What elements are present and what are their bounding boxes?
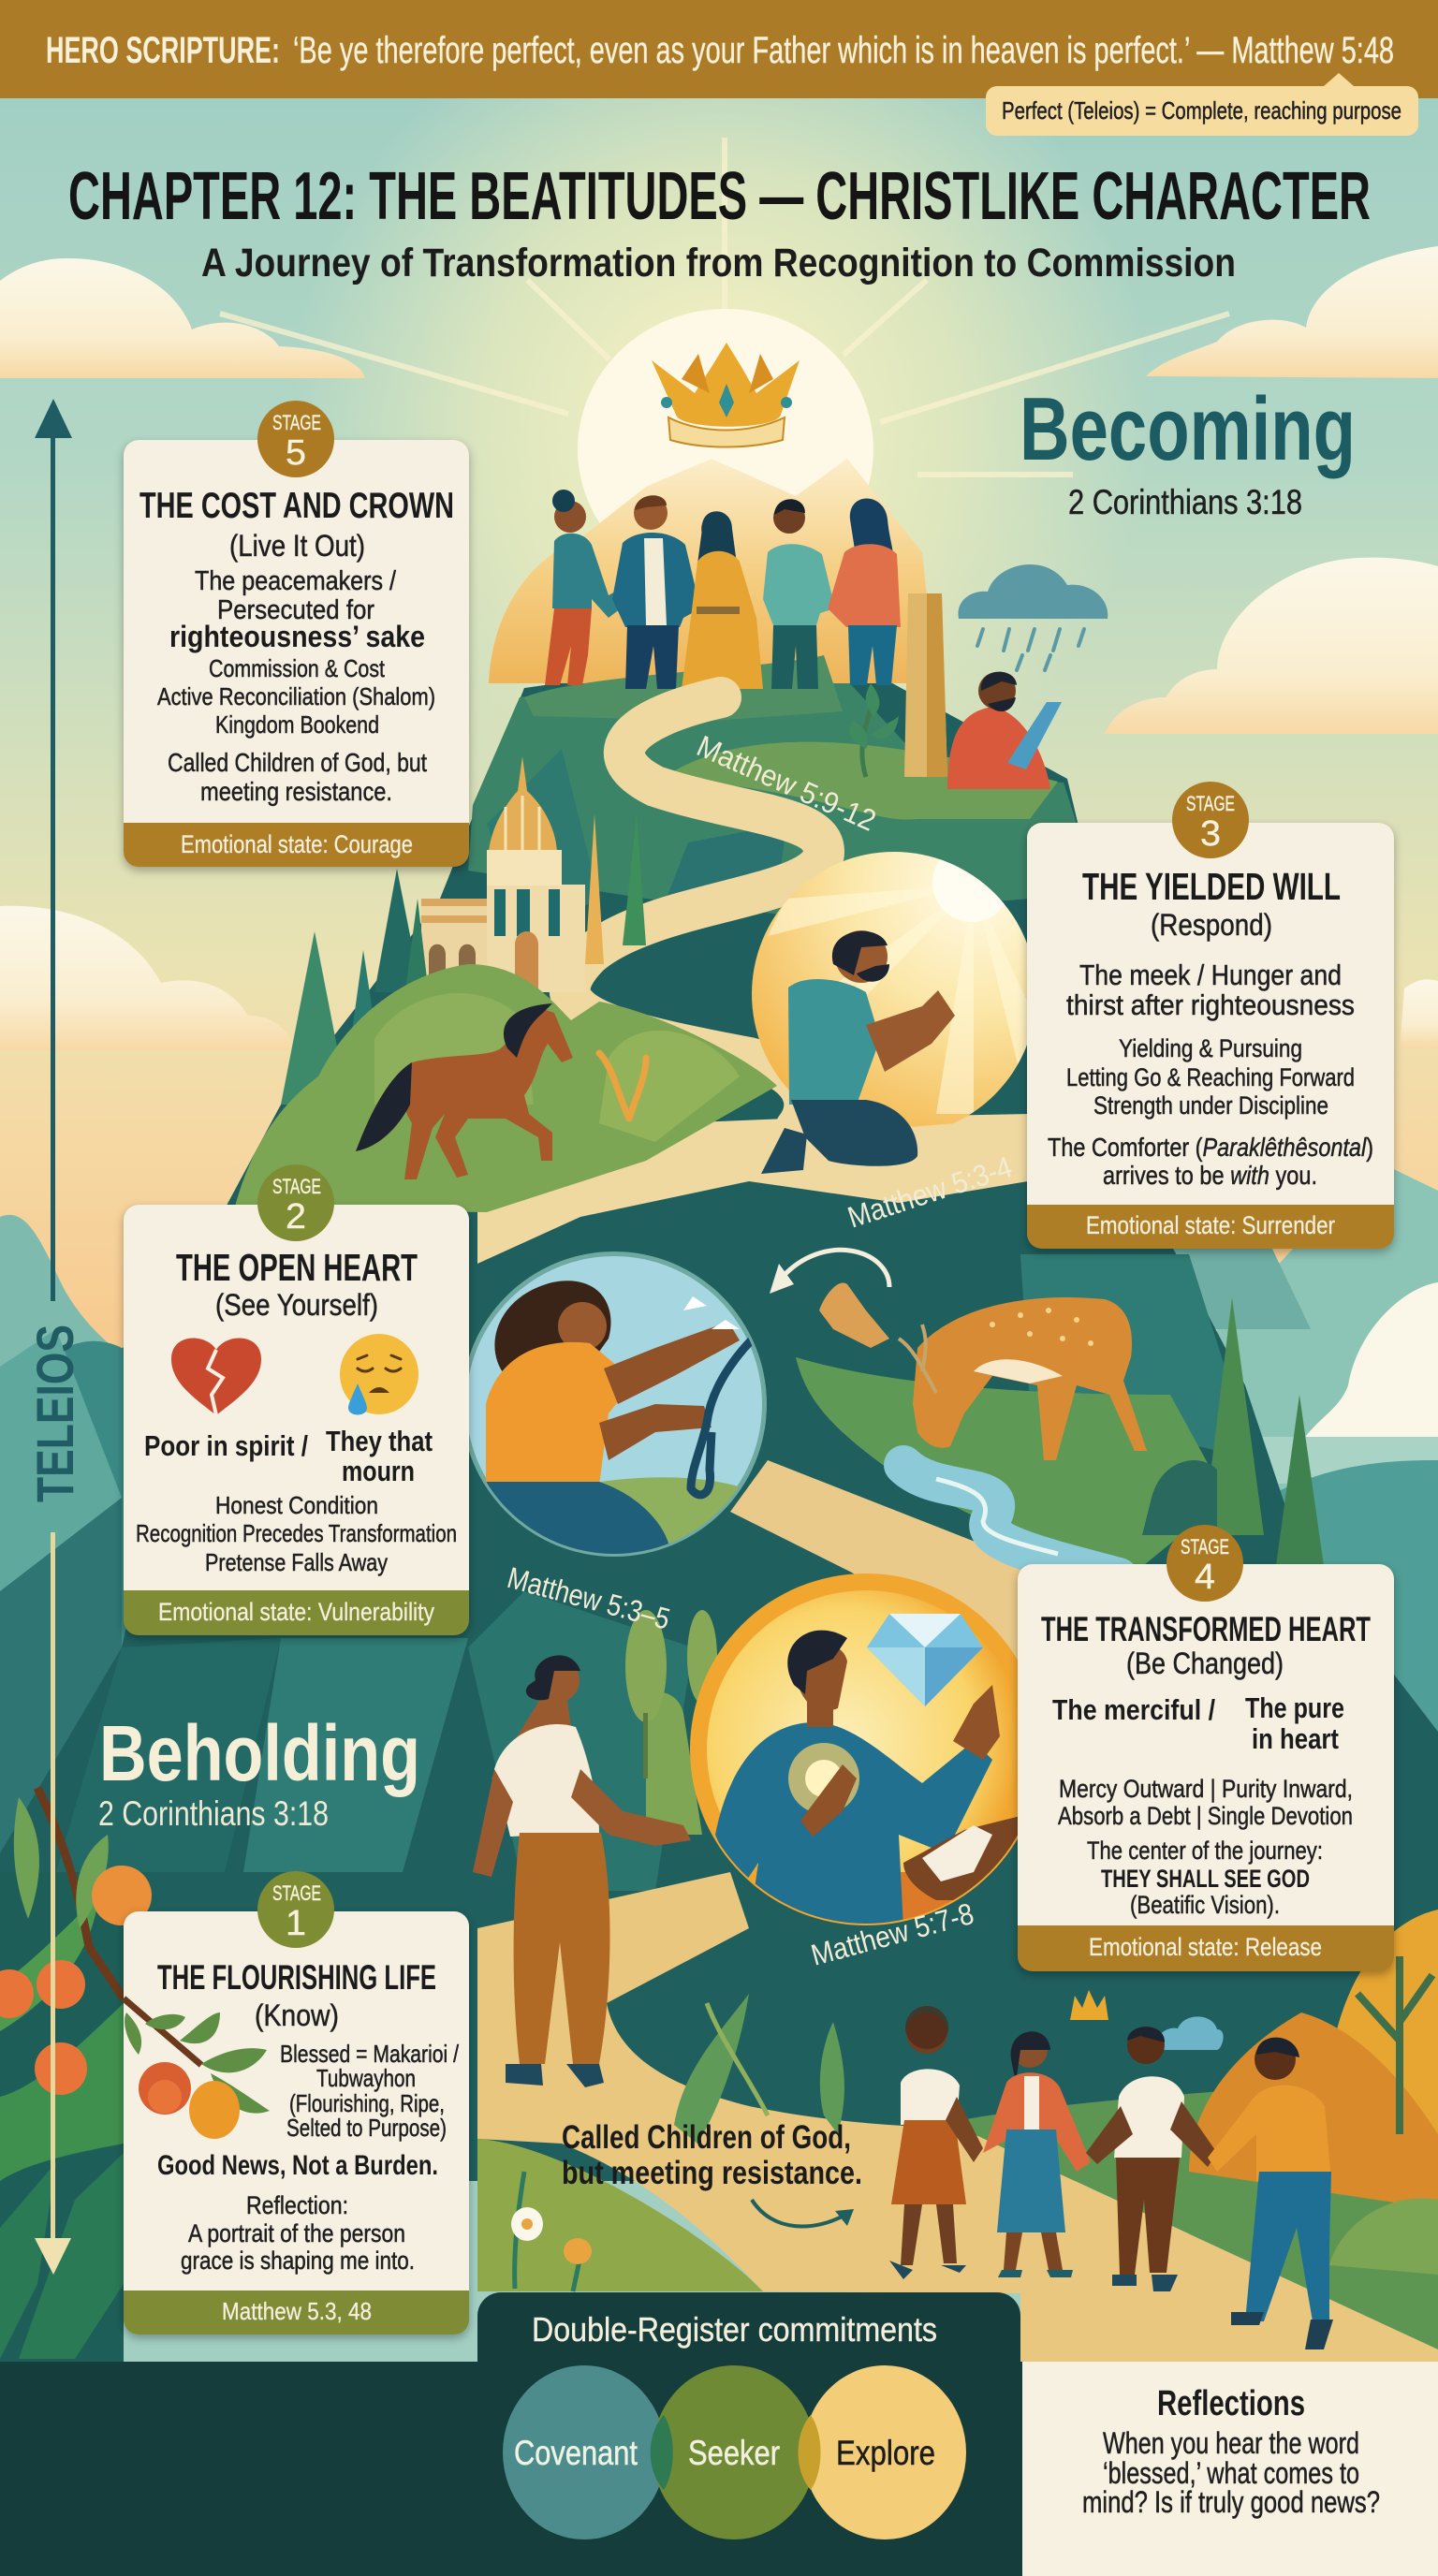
heading: beholding: Beholding — [99, 1709, 420, 1797]
icon: fruit branch — [124, 1998, 270, 2139]
beatitude definition: (Flourishing, Ripe, — [289, 2089, 445, 2117]
panel: reflections — [1022, 2362, 1438, 2576]
icon: crying face — [340, 1334, 418, 1415]
illustration: returning arrow with animal — [770, 1250, 889, 1348]
badge — [257, 401, 334, 477]
badge: STAGE — [1181, 1535, 1229, 1559]
callout: called children of god: Called Children of God, — [562, 2119, 851, 2156]
lower middle path — [477, 1460, 1438, 2368]
themes: Pretense Falls Away — [205, 1548, 388, 1576]
badge: 2 — [286, 1197, 306, 1237]
themes: Strength under Discipline — [1093, 1091, 1328, 1120]
summary: The Comforter (Paraklêthêsontal) — [1048, 1133, 1373, 1162]
emotional state: Emotional state: Vulnerability — [158, 1598, 434, 1626]
illustration: domed castle — [421, 756, 646, 1002]
badge: 5 — [286, 433, 306, 473]
illustration: horse — [356, 1003, 646, 1179]
summary: meeting resistance. — [200, 777, 392, 806]
summary — [168, 748, 427, 806]
themes: Honest Condition — [215, 1491, 378, 1519]
beatitudes: Persecuted for — [217, 595, 374, 625]
icon: crown — [652, 343, 800, 447]
venn diagram — [503, 2365, 966, 2539]
bottom dark band — [0, 2362, 1022, 2576]
summary — [1087, 1837, 1323, 1919]
scripture label: matthew 5:7-8: Matthew 5:7-8 — [807, 1896, 977, 1972]
card: stage 1 the flourishing life — [124, 1871, 469, 2334]
walker two — [983, 2031, 1091, 2277]
illustration: man with glowing heart in golden circle — [690, 1573, 1042, 1928]
badge: 3 — [1200, 814, 1221, 854]
walker three — [1086, 2027, 1217, 2291]
heading: THE YIELDED WILL — [1082, 865, 1341, 908]
left axis arrow down — [35, 1532, 71, 2275]
illustration: five people holding hands on the summit — [524, 490, 901, 721]
walker one — [889, 2006, 983, 2279]
hero scripture banner: HERO SCRIPTURE: — [46, 30, 280, 71]
illustration: kneeling man in sunlit circle — [752, 852, 1027, 1203]
beatitudes — [1066, 959, 1355, 1021]
summary: arrives to be with you. — [1103, 1161, 1317, 1190]
panel: double-register commitments — [477, 2292, 1020, 2576]
subheading: (Live It Out) — [229, 529, 365, 563]
walker four — [1208, 2038, 1333, 2349]
bottom right scenery — [511, 1910, 1438, 2291]
heading: becoming: 2 Corinthians 3:18 — [1068, 483, 1302, 521]
summary: The center of the journey: — [1087, 1837, 1323, 1865]
badge: STAGE — [272, 411, 321, 434]
beatitudes: Poor in spirit / — [144, 1429, 308, 1462]
subheading: (Respond) — [1151, 908, 1272, 942]
standing woman walking on the path — [473, 1610, 717, 2087]
themes — [1066, 1034, 1355, 1120]
panel: reflections: ‘blessed,’ what comes to — [1103, 2456, 1359, 2490]
hero scripture banner — [0, 0, 1438, 98]
person two — [612, 495, 700, 689]
panel: reflections: Reflections — [1157, 2384, 1305, 2423]
icon: broken heart — [171, 1339, 261, 1415]
callout: called children of god: but meeting resistance. — [562, 2155, 862, 2191]
scripture label: matthew 5:3-4: Matthew 5:3-4 — [844, 1149, 1016, 1235]
heading: THE OPEN HEART — [176, 1246, 418, 1289]
beatitudes: mourn — [342, 1455, 415, 1487]
emotional state: Emotional state: Surrender — [1086, 1211, 1335, 1239]
beatitudes: The pure — [1245, 1691, 1344, 1724]
person three — [682, 511, 763, 689]
badge — [1172, 782, 1249, 858]
callout: called children of god — [562, 2119, 862, 2191]
beatitudes: righteousness’ sake — [169, 620, 425, 653]
badge — [257, 1164, 334, 1241]
badge — [1167, 1525, 1243, 1602]
panel: reflections: When you hear the word — [1103, 2426, 1359, 2460]
beatitudes — [169, 566, 425, 653]
subheading: (Know) — [255, 1998, 339, 2032]
scripture label: matthew 5:9-12: Matthew 5:9-12 — [692, 729, 881, 838]
beatitudes — [1052, 1691, 1344, 1755]
badge: 1 — [286, 1904, 306, 1943]
emotional state: Emotional state: Release — [1089, 1933, 1322, 1961]
themes — [1058, 1775, 1353, 1830]
distant mountains — [0, 1114, 1438, 1966]
illustration: four people walking hand in hand — [889, 2006, 1333, 2349]
clouds — [0, 246, 1438, 1050]
background sky — [0, 0, 1438, 1404]
badge: 4 — [1195, 1558, 1215, 1597]
heading: THE COST AND CROWN — [139, 486, 454, 526]
beatitudes: in heart — [1252, 1722, 1339, 1755]
heading: THE FLOURISHING LIFE — [157, 1958, 436, 1997]
central mountain — [0, 646, 1438, 2181]
heading: beholding: 2 Corinthians 3:18 — [98, 1794, 329, 1833]
summary: THEY SHALL SEE GOD — [1101, 1865, 1310, 1893]
panel: double-register commitments: Double-Register commitments — [532, 2310, 937, 2349]
beatitude definition: Tubwayhon — [316, 2064, 416, 2092]
themes: Commission & Cost — [209, 654, 386, 682]
footer scripture: Matthew 5.3, 48 — [222, 2297, 372, 2325]
themes: Recognition Precedes Transformation — [136, 1519, 457, 1547]
themes — [136, 1491, 457, 1576]
beatitudes — [144, 1425, 433, 1487]
beatitudes: The meek / Hunger and — [1079, 959, 1342, 991]
summary: (Beatific Vision). — [1130, 1891, 1280, 1919]
reflection: Reflection: — [246, 2191, 348, 2219]
green valley with stream — [796, 1297, 1325, 1582]
illustration: woman untangling rope in circle — [462, 1251, 770, 1573]
venn diagram: Explore — [836, 2434, 935, 2472]
card: stage 5 the cost and crown — [124, 401, 469, 867]
badge: STAGE — [272, 1881, 321, 1905]
venn diagram: Seeker — [688, 2434, 780, 2472]
illustration: left fruit tree background — [0, 1788, 152, 2362]
winding path upper — [477, 697, 1030, 1264]
themes — [157, 654, 435, 739]
summit golden peak with glow — [489, 309, 936, 683]
arrow: toward walkers — [752, 2200, 854, 2227]
themes: Absorb a Debt | Single Devotion — [1058, 1802, 1353, 1830]
card: stage 3 the yielded will — [1027, 782, 1394, 1249]
scripture label: matthew 5:3-5: Matthew 5:3–5 — [504, 1560, 673, 1636]
heading: beholding — [98, 1709, 420, 1833]
axis label teleios: TELEIOS — [25, 1325, 84, 1502]
green hill with horse — [234, 964, 777, 1212]
summary: Called Children of God, but — [168, 748, 427, 777]
person one — [545, 490, 633, 685]
subheading: (See Yourself) — [215, 1288, 378, 1322]
person four — [763, 499, 835, 689]
badge: STAGE — [1186, 792, 1235, 815]
callout: perfect teleios — [986, 73, 1418, 136]
emotional state: Emotional state: Courage — [181, 830, 413, 858]
left axis arrow up — [35, 399, 72, 1301]
reflection — [181, 2191, 415, 2275]
summary — [1048, 1133, 1373, 1190]
beatitude definition: Selted to Purpose) — [286, 2114, 447, 2142]
illustration: stone pillar and olive plant — [849, 593, 947, 777]
badge: STAGE — [272, 1175, 321, 1198]
themes: Letting Go & Reaching Forward — [1066, 1063, 1355, 1091]
subtitle: A Journey of Transformation from Recognition to Commission — [201, 241, 1236, 285]
beatitude definition: Blessed = Makarioi / — [280, 2040, 460, 2068]
card: stage 2 the open heart — [124, 1164, 469, 1635]
beatitudes: thirst after righteousness — [1066, 988, 1355, 1021]
heading: becoming — [1020, 379, 1356, 521]
illustration: persecuted man with sword — [947, 672, 1062, 789]
illustration: deer drinking — [899, 1297, 1147, 1460]
themes: Mercy Outward | Purity Inward, — [1059, 1775, 1353, 1803]
themes: Kingdom Bookend — [215, 710, 379, 739]
reflection: A portrait of the person — [188, 2219, 405, 2247]
icon: rain cloud — [958, 564, 1108, 670]
beatitudes: The peacemakers / — [195, 566, 397, 596]
icon: diamond — [867, 1614, 983, 1706]
themes: Yielding & Pursuing — [1119, 1034, 1302, 1062]
key message: Good News, Not a Burden. — [157, 2150, 438, 2181]
themes: Active Reconciliation (Shalom) — [157, 682, 435, 710]
reflection: grace is shaping me into. — [181, 2247, 415, 2275]
conifer trees left — [281, 869, 431, 1144]
subheading: (Be Changed) — [1126, 1647, 1284, 1680]
person five — [828, 498, 901, 685]
beatitudes: They that — [326, 1425, 433, 1457]
badge — [257, 1871, 334, 1948]
beatitudes: The merciful / — [1052, 1693, 1215, 1726]
venn diagram: Covenant — [514, 2434, 638, 2472]
beatitude definition — [280, 2040, 460, 2142]
card: stage 4 the transformed heart — [1018, 1525, 1394, 1971]
